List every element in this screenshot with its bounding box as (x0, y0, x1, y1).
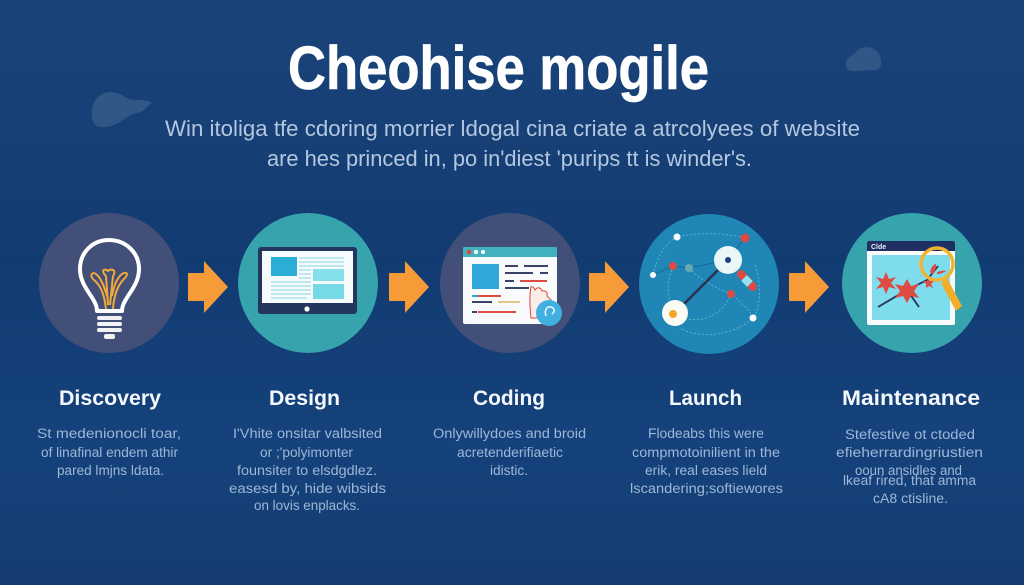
step 2 text: Design: easesd by, hide wibsids (229, 481, 386, 496)
decorative cloud right (846, 47, 881, 71)
arrow 4 (789, 261, 829, 313)
decorative cloud left (92, 92, 152, 127)
step 1 text: Discovery: of linafinal endem athir (41, 445, 178, 460)
step 2 text: Design: founsiter to elsdgdlez. (237, 463, 377, 478)
step 2 text: Design: or ;'polyimonter (260, 445, 353, 460)
step 5 text: Maintenance: efieherrardingriustien (836, 445, 983, 460)
step 4 icon: launch network (639, 214, 779, 354)
step 3 text: Coding: Coding (473, 387, 545, 410)
step 1 text: Discovery: pared lmjns ldata. (57, 463, 164, 478)
step 5 text: Maintenance: Stefestive ot ctoded (845, 427, 975, 442)
step 3 text: Coding: Onlywillydoes and broid (433, 426, 586, 441)
step 1 icon: light bulb (39, 213, 179, 353)
step 5 text: Maintenance: cA8 ctisline. (873, 491, 948, 506)
step 2 icon: tablet (238, 213, 378, 353)
subtitle: Win itoliga tfe cdoring morrier ldogal cina criate a atrcolyees of website (165, 116, 860, 141)
step 5 text: Maintenance: lkeaf rired, that amma (843, 473, 976, 488)
step 3 icon: code window (440, 213, 580, 353)
arrow 1 (188, 261, 228, 313)
step 5 icon: maintenance window: Clde (871, 244, 886, 251)
step 1 text: Discovery (37, 387, 181, 478)
step 2 text: Design (229, 387, 386, 513)
step 5 icon: maintenance window (842, 213, 982, 353)
step 4 text: Launch (630, 387, 783, 496)
step 2 text: Design: on lovis enplacks. (254, 498, 360, 513)
step 4 text: Launch: erik, real eases lield (645, 463, 767, 478)
step 4 text: Launch: Launch (669, 387, 742, 410)
step 5 text: Maintenance: ooun ansidles and (855, 463, 962, 478)
step 2 text: Design: Design (269, 387, 340, 410)
subtitle (165, 116, 860, 171)
step 3 text: Coding (433, 387, 586, 478)
step 1 text: Discovery: St medenionocli toar, (37, 426, 181, 441)
step 5 text: Maintenance: Maintenance (842, 387, 980, 410)
step 4 text: Launch: Flodeabs this were (648, 426, 764, 441)
step 4 text: Launch: compmotoinilient in the (632, 445, 780, 460)
step 5 text: Maintenance (836, 387, 983, 506)
step 3 text: Coding: idistic. (490, 463, 528, 478)
subtitle: are hes princed in, po in'diest 'purips tt is winder's. (267, 146, 752, 171)
title: Cheohise mogile (288, 34, 709, 102)
arrow 3 (589, 261, 629, 313)
step 4 text: Launch: lscandering;softiewores (630, 481, 783, 496)
step 1 text: Discovery: Discovery (59, 387, 161, 410)
step 2 text: Design: I'Vhite onsitar valbsited (233, 426, 382, 441)
step 3 text: Coding: acretenderifiaetic (457, 445, 563, 460)
arrow 2 (389, 261, 429, 313)
